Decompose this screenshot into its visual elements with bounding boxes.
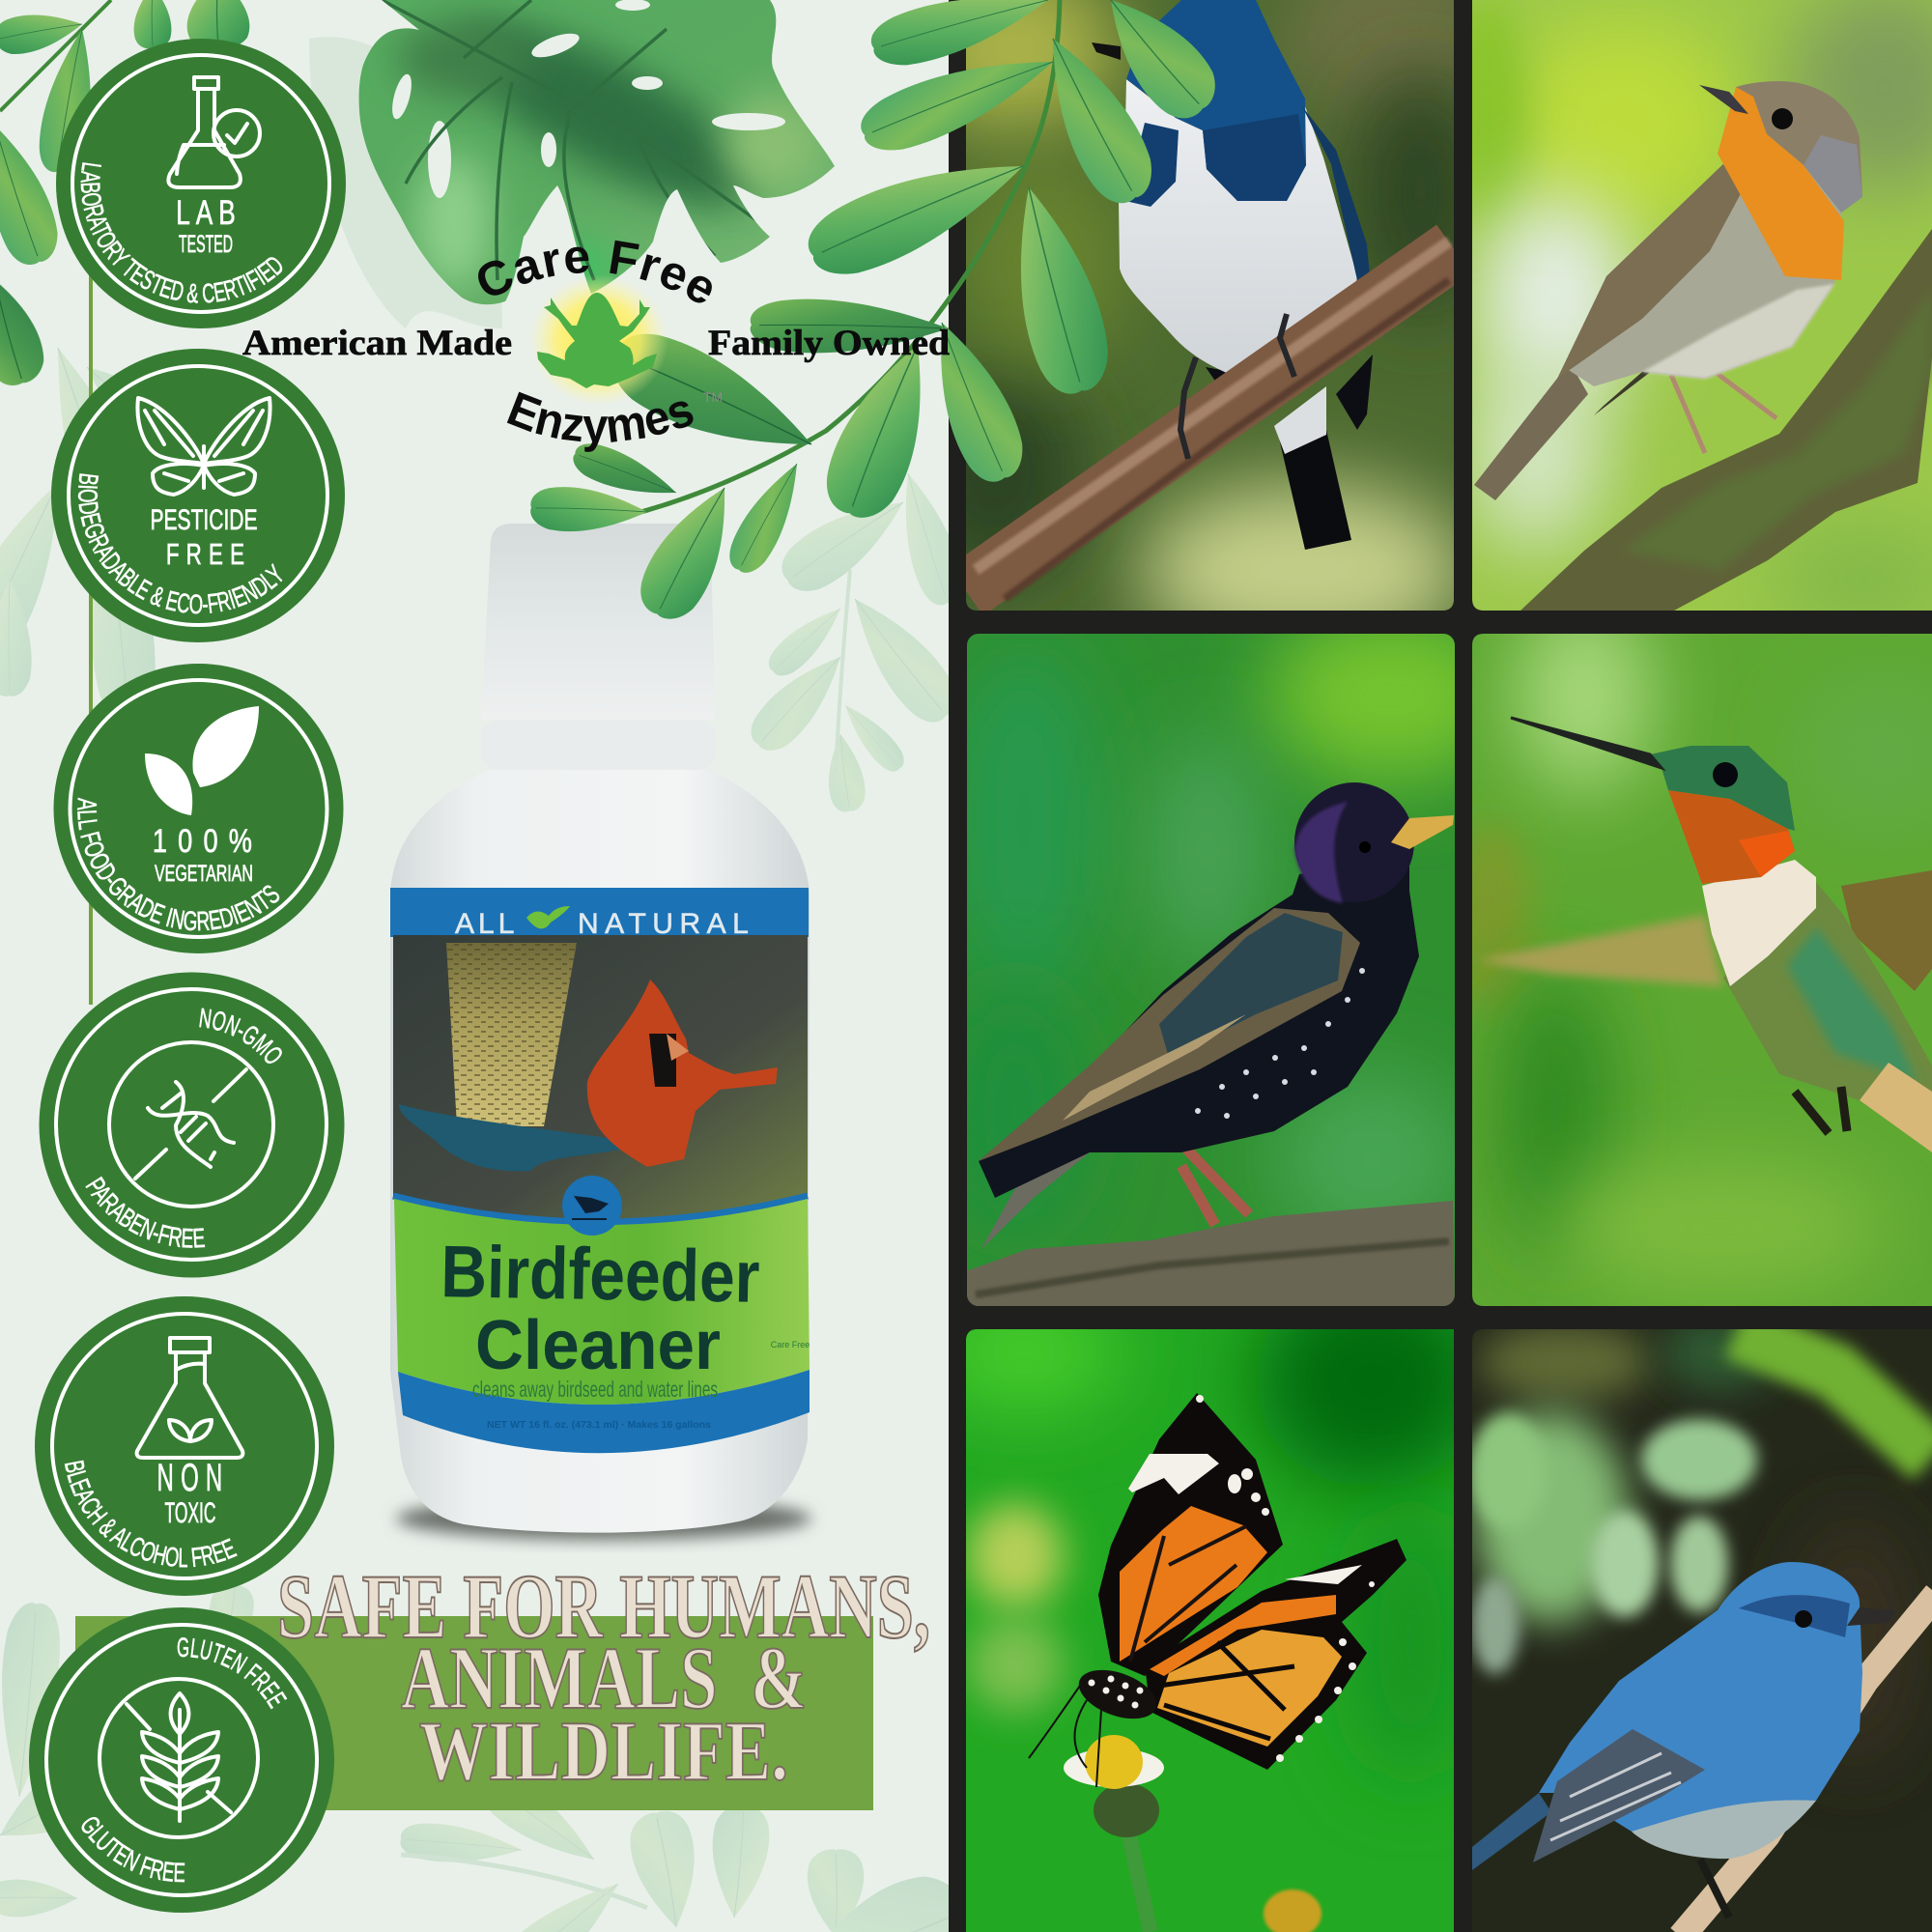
- badge: vegetarian: [54, 664, 344, 953]
- headline: ANIMALS &: [401, 1629, 807, 1727]
- label text all natural: ALL: [455, 908, 518, 940]
- label text all natural: [455, 908, 754, 940]
- faded background foliage: [0, 37, 983, 1932]
- badge title: LAB: [176, 193, 242, 232]
- curved caption top: GLUTEN FREE: [178, 1637, 288, 1710]
- icon: flask with leaf: [137, 1338, 242, 1458]
- headline: [277, 1555, 930, 1799]
- icon: frog: [537, 293, 657, 388]
- label bottom blue band: [398, 1370, 810, 1453]
- product name: Birdfeeder: [440, 1231, 760, 1319]
- badge: pesticide free: [51, 349, 345, 642]
- badge subtitle: TESTED: [179, 231, 233, 258]
- logo glow: [529, 274, 668, 406]
- badge title: PESTICIDE: [151, 504, 257, 536]
- badge subtitle: FREE: [166, 537, 251, 571]
- badge: lab tested: [56, 39, 346, 328]
- feeder seeds: [446, 943, 577, 1126]
- net weight: NET WT 16 fl. oz. (473.1 ml) · Makes 16 gallons: [487, 1420, 711, 1431]
- product bottle: [390, 524, 811, 1540]
- feeder dish: [399, 1104, 644, 1171]
- brand logo: [478, 240, 723, 452]
- photo: monarch butterfly on flower: [966, 1329, 1454, 1932]
- product name: Cleaner: [475, 1307, 721, 1384]
- curved caption: LABORATORY TESTED & CERTIFIED: [81, 162, 282, 303]
- cardinal: [587, 980, 778, 1167]
- label bird icon: [562, 1176, 622, 1236]
- badge: non toxic: [35, 1296, 334, 1596]
- green vertical line: [89, 193, 93, 1005]
- icon: crossed dna: [135, 1069, 246, 1179]
- curved caption bottom: PARABEN-FREE: [85, 1177, 205, 1248]
- badge title: NON: [157, 1456, 229, 1498]
- logo text: enzymes: Enzymes: [506, 392, 694, 452]
- icon: green leaf on label: [526, 906, 570, 928]
- label green panel: [394, 1199, 810, 1405]
- photo: blue and white flycatcher on branch: [966, 0, 1454, 611]
- top-left foliage: [0, 0, 249, 390]
- leaves over the photo and bottle: [529, 0, 1229, 630]
- photo: robin on mossy branch: [1449, 0, 1932, 638]
- badge subtitle: TOXIC: [164, 1497, 216, 1529]
- badge title: 100%: [153, 822, 263, 860]
- icon: two leaves: [145, 706, 259, 815]
- text: american made: American Made: [242, 324, 512, 363]
- icon: butterfly: [137, 398, 270, 495]
- small label logo: Care Free: [771, 1340, 810, 1350]
- monstera leaf: [348, 0, 850, 319]
- badge subtitle: VEGETARIAN: [155, 861, 253, 887]
- label text all natural: NATURAL: [578, 908, 754, 940]
- text: family owned: Family Owned: [708, 324, 950, 363]
- curved caption: ALL FOOD-GRADE INGREDIENTS: [77, 798, 280, 931]
- photo: starling on log: [967, 634, 1455, 1306]
- label blue stripe: [393, 1196, 808, 1222]
- bottle shadow: [396, 1497, 811, 1540]
- headline green banner: [75, 1616, 873, 1810]
- left panel background: [0, 0, 949, 1932]
- headline: WILDLIFE.: [419, 1705, 788, 1799]
- curved caption bottom: GLUTEN FREE: [81, 1817, 185, 1882]
- label top band: [390, 888, 809, 937]
- logo text: care free: Care Free: [478, 240, 712, 303]
- curved caption top: NON-GMO: [199, 1009, 282, 1064]
- curved caption: BLEACH & ALCOHOL FREE: [64, 1461, 238, 1567]
- product name: [440, 1231, 760, 1384]
- headline: SAFE FOR HUMANS,: [277, 1555, 930, 1658]
- badge: gluten free: [29, 1607, 334, 1913]
- label photo: [393, 935, 808, 1222]
- icon: crossed wheat: [127, 1693, 231, 1821]
- icon: flask with check: [168, 77, 260, 187]
- curved caption: BIODEGRADABLE & ECO-FRIENDLY: [77, 473, 282, 614]
- photo: blue flycatcher on twig: [1469, 1314, 1932, 1932]
- bottle neck ring: [481, 720, 716, 770]
- badge: non-gmo: [39, 972, 344, 1277]
- bottle cap: [481, 524, 715, 720]
- bottle body: [390, 770, 810, 1533]
- photo: ruby-throated hummingbird: [1454, 599, 1932, 1306]
- tagline: cleans away birdseed and water lines: [472, 1377, 718, 1402]
- trademark: TM: [703, 389, 723, 405]
